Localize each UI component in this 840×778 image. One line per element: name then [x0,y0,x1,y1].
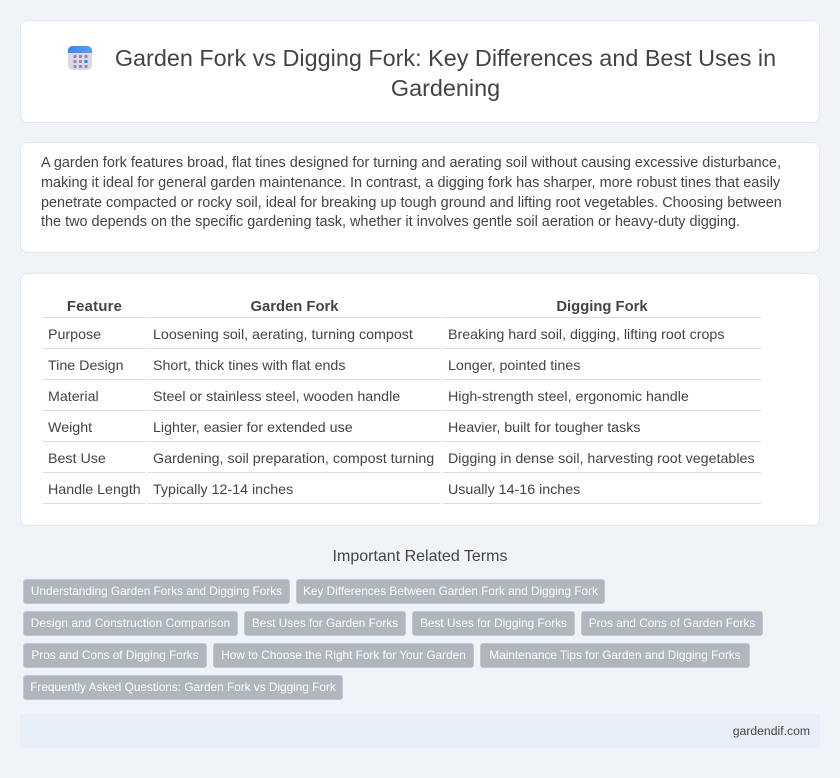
related term tags: Pros and Cons of Digging Forks [31,648,199,662]
related term tags: Design and Construction Comparison [31,616,230,630]
intro text: A garden fork features broad, flat tines designed for turning and aerating soil without causing excessive disturbance, [41,155,781,171]
comparison table: Heavier, built for tougher tasks [448,420,640,436]
title: Garden Fork vs Digging Fork: Key Differences and Best Uses in Gardening [115,45,776,101]
intro text: the two depends on the specific gardening task, whether it involves gentle soil aeration or heavy-duty digging. [41,214,740,230]
comparison table: Digging in dense soil, harvesting root vegetables [448,451,755,467]
related term tags: Pros and Cons of Garden Forks [589,616,755,630]
comparison table: High-strength steel, ergonomic handle [448,389,689,405]
intro panel [20,142,820,253]
related term tags: Understanding Garden Forks and Digging Forks [31,584,282,598]
icon: calendar [68,46,92,70]
intro text: penetrate compacted or rocky soil, ideal for breaking up tough ground and lifting root vegetables. Choosing between [41,195,782,211]
header panel [20,20,820,123]
related term tags: Key Differences Between Garden Fork and Digging Fork [303,584,598,598]
comparison table: Handle Length [48,482,141,498]
footer bar [20,714,820,748]
comparison table: Weight [48,420,92,436]
comparison table: Purpose [48,327,101,343]
comparison table: Gardening, soil preparation, compost turning [153,451,434,467]
comparison table: Breaking hard soil, digging, lifting root crops [448,327,724,343]
related term tags: Best Uses for Garden Forks [252,616,398,630]
comparison table: Best Use [48,451,106,467]
comparison table: Tine Design [48,358,124,374]
comparison table: Short, thick tines with flat ends [153,358,345,374]
comparison table: Digging Fork [556,299,648,315]
table panel [20,273,820,526]
related term tags [23,579,763,700]
related term tags: Frequently Asked Questions: Garden Fork vs Digging Fork [30,680,336,694]
intro text: making it ideal for general garden maintenance. In contrast, a digging fork has sharper, more robust tines that easily [41,175,780,191]
comparison table: Steel or stainless steel, wooden handle [153,389,400,405]
related terms heading: Important Related Terms [333,548,507,565]
intro text [41,155,782,230]
comparison table: Longer, pointed tines [448,358,580,374]
comparison table [43,299,761,504]
comparison table: Lighter, easier for extended use [153,420,353,436]
related term tags: How to Choose the Right Fork for Your Garden [221,648,466,662]
comparison table: Material [48,389,99,405]
related term tags: Best Uses for Digging Forks [420,616,567,630]
comparison table: Typically 12-14 inches [153,482,293,498]
comparison table: Garden Fork [250,299,338,315]
related term tags: Maintenance Tips for Garden and Digging Forks [489,648,741,662]
comparison table: Loosening soil, aerating, turning compost [153,327,413,343]
comparison table: Feature [67,299,122,315]
comparison table: Usually 14-16 inches [448,482,580,498]
footer source text: gardendif.com [733,724,810,738]
